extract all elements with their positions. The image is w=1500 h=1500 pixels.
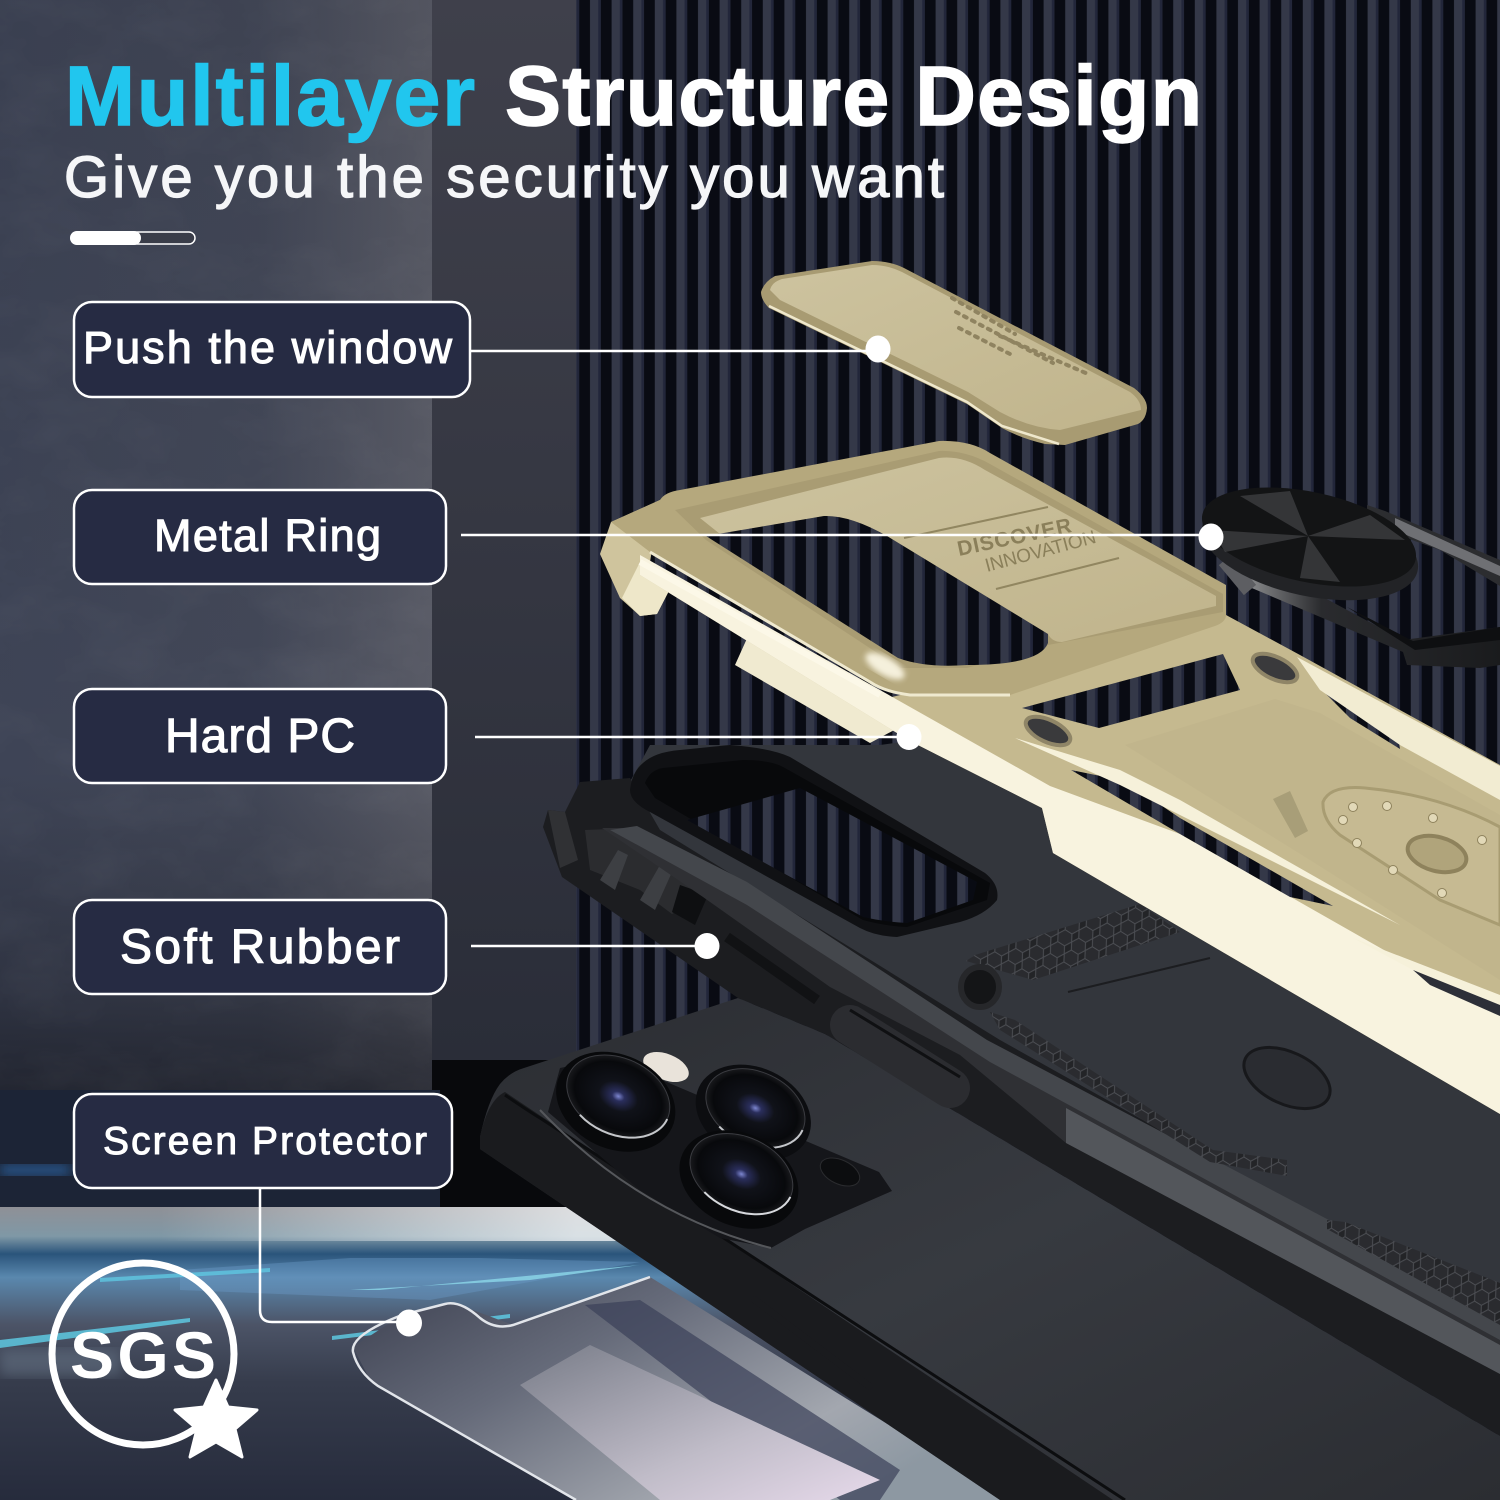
ring top arm [1367, 505, 1500, 586]
disc sunburst [1212, 491, 1405, 582]
floor with reflections [0, 1207, 1100, 1500]
dark band [585, 1300, 900, 1500]
badge star [175, 1380, 257, 1457]
raised panel [1125, 699, 1500, 980]
grip mesh [966, 904, 1180, 980]
rim inner floor [675, 451, 1223, 668]
progress pill [70, 231, 195, 245]
lens two [680, 1046, 827, 1179]
part: metal ring holder [1192, 470, 1500, 668]
label: metal ring [74, 490, 446, 584]
light panel [520, 1345, 880, 1500]
side slot [1325, 693, 1400, 749]
black side [543, 778, 1500, 1436]
side button [850, 1025, 950, 1088]
circle mark [1234, 1035, 1340, 1121]
label: push the window [74, 302, 470, 397]
leader line: soft rubber [471, 933, 720, 959]
title [65, 49, 1202, 143]
diagonal tab [1273, 791, 1308, 838]
badge text: SGS [70, 1318, 216, 1392]
part: slide window cover [761, 261, 1147, 445]
label: metal ring: Metal Ring [154, 510, 381, 561]
dark slot [727, 937, 817, 1000]
SGS badge [52, 1263, 257, 1457]
grip ridges [952, 298, 1088, 374]
label: soft rubber [74, 900, 446, 994]
cream highlights [1297, 657, 1500, 800]
case plate [620, 741, 1500, 1340]
title: Structure Design [505, 49, 1202, 143]
pad [700, 458, 1216, 642]
camera module [548, 1058, 892, 1248]
embossed text: INNOVATION [983, 527, 1098, 577]
frame opening shadow [645, 760, 990, 927]
frame opening stripes [687, 788, 977, 923]
label: screen protector: Screen Protector [103, 1120, 427, 1163]
lidar sensor [816, 1152, 864, 1192]
leader line: screen protector [260, 1188, 422, 1336]
embossed text: DISCOVER [955, 514, 1074, 561]
part: phone [480, 998, 1500, 1500]
label: screen protector [74, 1094, 452, 1188]
flash [639, 1046, 693, 1088]
ring lower arm [1245, 560, 1500, 668]
rim outer [611, 441, 1226, 695]
back tab [735, 634, 898, 743]
embossed text [955, 514, 1098, 577]
cream outer strip [640, 555, 1500, 1114]
leader line: push the window [470, 336, 890, 362]
disc face [1193, 470, 1425, 604]
label: hard PC [74, 689, 446, 783]
window [706, 516, 1048, 666]
label: soft rubber: Soft Rubber [120, 921, 400, 974]
screen protector glass [353, 1277, 1010, 1500]
frame rim [630, 745, 998, 937]
volume button [755, 1300, 869, 1386]
small ring button [961, 967, 999, 1007]
part: camera cover frame [611, 441, 1226, 695]
ring mount [1323, 788, 1500, 925]
part: rubber camera frame [630, 745, 998, 937]
phone edge [480, 1092, 1113, 1500]
left leg [600, 500, 672, 616]
lens three [663, 1112, 815, 1247]
embossed lines [904, 507, 1119, 589]
label: push the window: Push the window [83, 322, 452, 373]
lower slot [1071, 770, 1333, 906]
subtitle: Give you the security you want [64, 145, 944, 210]
rim front highlight [650, 552, 1010, 695]
corner holes [1022, 711, 1074, 751]
window slot [1022, 654, 1240, 728]
gold body [640, 562, 1500, 1114]
leader line: metal ring [461, 524, 1224, 550]
leader line: hard PC [475, 724, 922, 750]
bumper blocks [548, 810, 708, 925]
disc side [1192, 478, 1428, 618]
title: Multilayer [65, 49, 475, 143]
lens one [540, 1033, 692, 1171]
part: hard PC body [600, 500, 1500, 1114]
part: case back and bumper [543, 741, 1500, 1436]
label: hard PC: Hard PC [165, 710, 355, 763]
badge ring [52, 1263, 234, 1445]
grey band [602, 828, 1500, 1374]
